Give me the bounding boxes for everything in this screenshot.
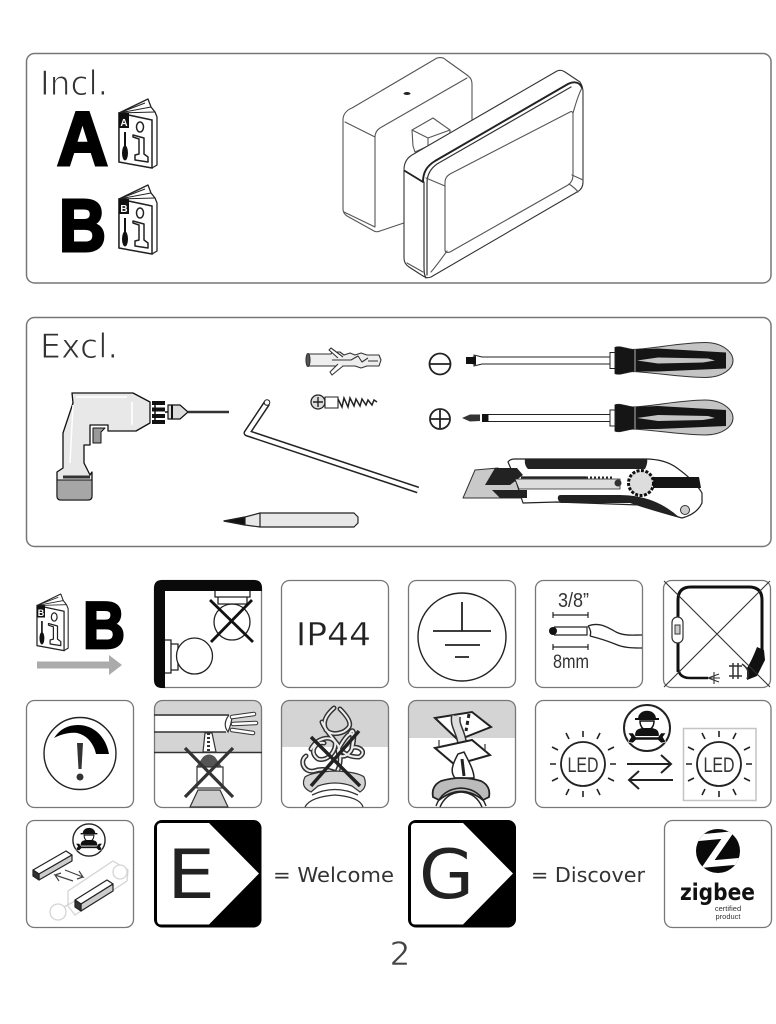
icon tile: G Discover [408,820,516,928]
panel: excluded tools [26,318,771,546]
icon tile: IP44: IP44 [296,616,371,654]
icon tile: wire strip length: 3/8” [558,590,589,612]
tool: hex key [247,400,418,490]
icon: LED left [550,731,616,797]
label: B: B [83,588,125,662]
heading: Excl.: Excl. [40,327,118,367]
icon tile: wire strip length [536,580,642,688]
label: B: B [59,184,106,267]
icon: service worker [624,705,670,751]
front box [404,70,583,278]
icon tile: warning hot surface [26,700,134,808]
icon tile: LED replaceable by qualified person [536,700,771,808]
icon tile: zigbee certified: product [715,912,741,921]
label: A: A [57,97,108,182]
icon: screw [311,395,377,409]
icon: manual A [119,99,157,168]
icon tile: no cord and plug [664,580,770,688]
tool: drill [57,393,229,500]
icon tile: do not hang on cable [154,700,262,808]
instruction: see manual B: B [38,608,45,618]
icon tile: do not tangle cable [282,700,388,808]
icon tile: wall mount only [154,580,262,688]
icon tile: E Welcome [154,820,262,928]
tool: phillips screwdriver [462,400,733,435]
icon tile: E Welcome: E [167,836,215,915]
arrows: swap [627,755,673,789]
icon: manual B [119,185,157,254]
bracket [412,118,450,152]
icon tile: earth symbol [408,580,516,688]
icon tile: wire strip length: 8mm [553,652,589,673]
heading: Incl.: Incl. [40,64,108,104]
text: = Welcome: = Welcome [273,863,394,887]
icon tile: zigbee certified [664,820,772,928]
page number: 2 [390,935,410,973]
icon tile: driver replacement [26,820,134,928]
icon tile: IP44 [282,580,388,688]
icon: manual A: A [120,118,128,129]
icon tile: zigbee certified: zigbee [680,880,755,906]
tool: utility knife [463,459,702,518]
tool: slotted screwdriver [466,342,733,378]
icon: LED right [686,731,752,797]
icon: slotted symbol [430,354,450,374]
icon: cross symbol [430,409,450,429]
icon tile: correct cable routing [408,700,516,808]
icon: manual B: B [120,204,128,215]
arrow [37,655,122,675]
back box [343,58,472,232]
icon tile: zigbee certified: certified [715,904,741,913]
instruction: see manual B [37,588,125,675]
text: = Discover: = Discover [531,863,646,887]
icon tile: G Discover: G [419,836,474,915]
product drawing: wall light with mounting box [343,58,583,278]
icon: wall plug [306,348,381,375]
panel: included items [26,54,771,283]
tool: pencil [224,513,358,527]
